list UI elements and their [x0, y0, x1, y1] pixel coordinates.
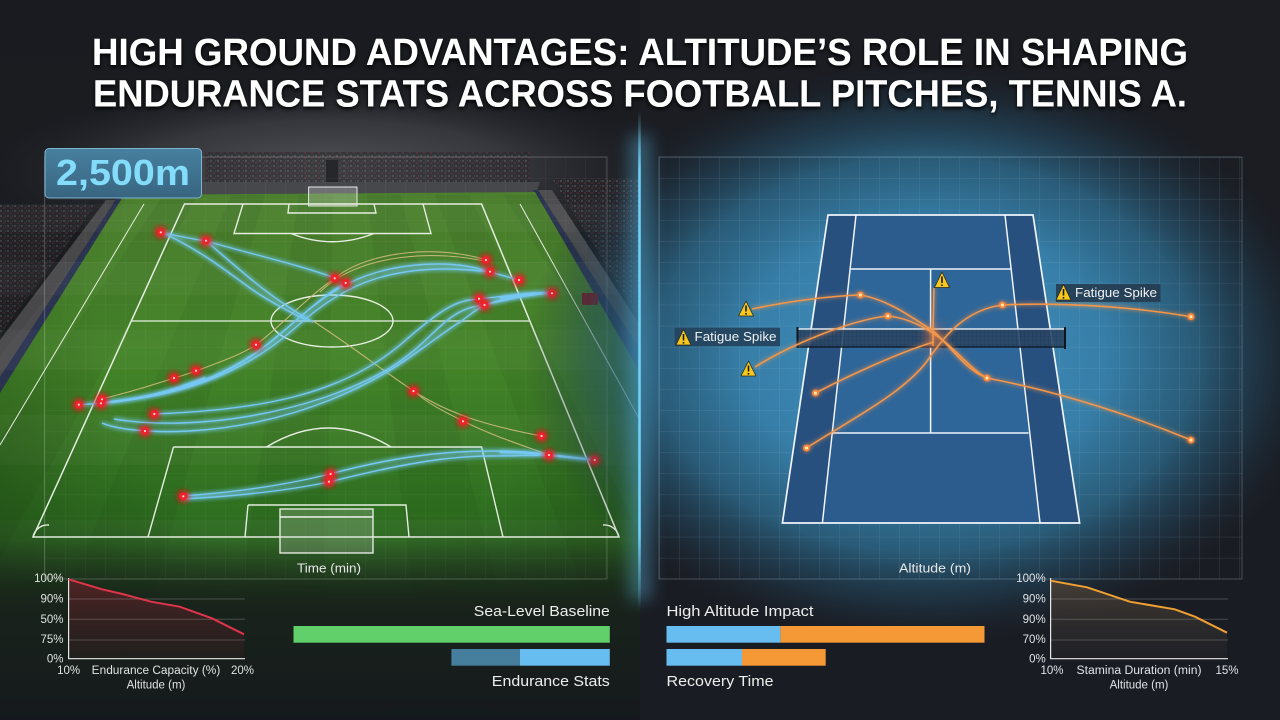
- data point highlights: [78, 231, 596, 497]
- chart: endurance capacity: Endurance Capacity (%): [92, 665, 220, 677]
- chart: endurance capacity: 90%: [40, 594, 64, 606]
- icon: warning upper left: [738, 301, 754, 316]
- backdrop grid: [659, 157, 1242, 579]
- chart: stamina duration: 10%: [1040, 665, 1064, 677]
- altitude trajectories: blue glowing paths: [79, 232, 595, 499]
- altitude badge: [45, 148, 202, 198]
- chart: endurance capacity: [34, 573, 254, 692]
- chart: stamina duration: 90%: [1023, 594, 1046, 606]
- chart: stamina duration: 90%: [1023, 614, 1046, 626]
- callout: fatigue spike right: [1056, 284, 1160, 302]
- axis label: altitude: Altitude (m): [899, 562, 971, 576]
- chart: endurance capacity: 0%: [47, 654, 64, 666]
- pitch markings: [0, 204, 640, 537]
- altitude trajectories: tan paths: [102, 252, 549, 455]
- callout: fatigue spike right: Fatigue Spike: [1075, 286, 1157, 300]
- chart: endurance capacity: 75%: [40, 634, 64, 646]
- title: HIGH GROUND ADVANTAGES: ALTITUDE’S ROLE IN SHAPING: [92, 32, 1188, 74]
- far goal: [309, 187, 357, 206]
- chart: endurance capacity: 50%: [40, 614, 64, 626]
- callout: fatigue spike left: [675, 328, 780, 346]
- chart: stamina duration: 70%: [1023, 634, 1046, 646]
- centre divider: [629, 110, 651, 610]
- icon: warning lower left: [741, 361, 756, 376]
- panel: tennis court: [525, 65, 1280, 645]
- callout: fatigue spike left: Fatigue Spike: [694, 330, 777, 344]
- tennis net: [798, 327, 1065, 349]
- court markings: [782, 215, 1080, 523]
- chart: endurance capacity: 10%: [57, 665, 80, 677]
- title: [92, 32, 1188, 116]
- near goal: [280, 509, 373, 553]
- pitch-side cart: [582, 293, 598, 305]
- bar group: high altitude impact: High Altitude Impact: [666, 604, 814, 620]
- grass surface: [0, 192, 638, 590]
- fatigue trajectories: [752, 288, 1191, 448]
- chart: stamina duration: 100%: [1016, 573, 1046, 585]
- chart: endurance capacity: 20%: [231, 665, 254, 677]
- fatigue data points: [803, 292, 1194, 451]
- fatigue hot spot: [927, 326, 941, 350]
- chart: endurance capacity: Altitude (m): [127, 680, 186, 692]
- bar group: high altitude impact: Recovery Time: [666, 674, 774, 690]
- player data points: [75, 228, 598, 500]
- bar group: sea-level baseline: [294, 604, 610, 690]
- court backdrop glow: [525, 65, 1280, 645]
- chart: stamina duration: 0%: [1029, 654, 1046, 666]
- chart: stamina duration: [1016, 573, 1239, 692]
- bar group: sea-level baseline: Endurance Stats: [492, 674, 610, 690]
- stadium stands: [0, 98, 638, 392]
- icon: warning centre: [934, 272, 950, 288]
- chart: stamina duration: Altitude (m): [1110, 680, 1169, 692]
- court surface: [782, 215, 1080, 523]
- altitude badge: 2,500m: [56, 152, 190, 193]
- data point highlights: [805, 294, 1192, 450]
- title: ENDURANCE STATS ACROSS FOOTBALL PITCHES, TENNIS A.: [93, 74, 1187, 116]
- panel: football pitch: [0, 98, 638, 590]
- bar group: sea-level baseline: Sea-Level Baseline: [474, 604, 610, 620]
- chart: stamina duration: 15%: [1215, 665, 1239, 677]
- chart: stamina duration: Stamina Duration (min): [1076, 665, 1202, 677]
- left panel frame and grid: [44, 157, 607, 579]
- axis label: time: Time (min): [297, 562, 361, 576]
- chart: endurance capacity: 100%: [34, 573, 64, 585]
- bar group: high altitude impact: [666, 604, 984, 690]
